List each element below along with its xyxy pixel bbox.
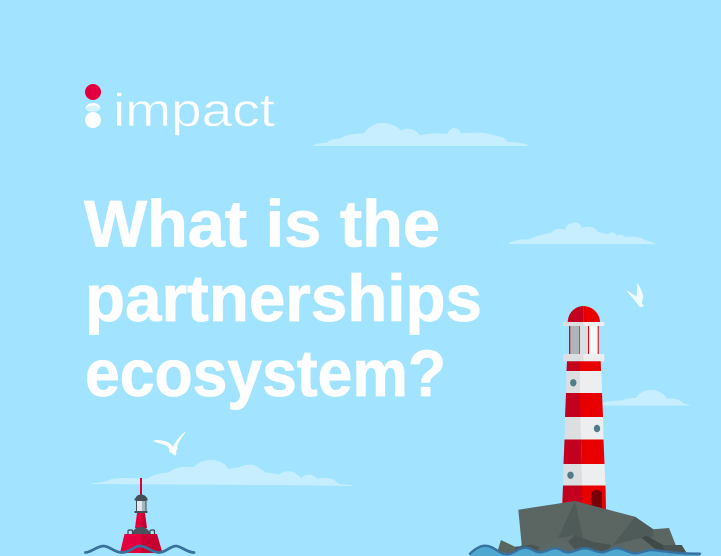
buoy [86,478,194,553]
logo mark: white dots [85,103,101,128]
cloud: top centre [313,123,529,146]
icon: seagull left [153,431,186,456]
rock: far left stone [497,540,521,555]
buoy: mast [140,478,142,495]
title: What is the [84,186,440,260]
lighthouse: door [592,490,602,509]
lighthouse: tower left shade stripes [566,361,580,371]
buoy: lantern glass [136,500,146,512]
icon: seagull right [626,283,644,307]
buoy: hatch dome [132,527,150,534]
lighthouse: upper gallery [563,322,583,326]
sea wave line [470,546,700,554]
buoy: handles [128,530,132,534]
rock: lower stones [515,544,540,553]
title: ecosystem? [85,336,446,410]
buoy: tower neck [135,513,141,528]
lighthouse: lower gallery [563,354,583,361]
title [84,186,482,410]
lighthouse: tower right stripes [580,361,601,371]
rock: shaded facets [558,501,583,538]
lighthouse: portholes [567,379,600,479]
cloud: lower left [92,460,353,486]
lighthouse: dome [568,306,583,322]
title: partnerships [85,261,482,335]
cloud: right of title [509,222,655,244]
lighthouse [562,306,606,510]
cloud: behind lighthouse [600,390,691,406]
logo wordmark: impact [113,84,275,136]
buoy: lantern roof [135,494,148,500]
lighthouse: lantern room [570,326,579,354]
logo: impact [85,84,275,136]
rock: main boulder [515,501,687,553]
rock island [470,501,700,556]
sea water [470,546,700,556]
buoy: wave [86,546,194,553]
buoy: hull [120,534,142,553]
logo mark: red dot [85,84,101,100]
